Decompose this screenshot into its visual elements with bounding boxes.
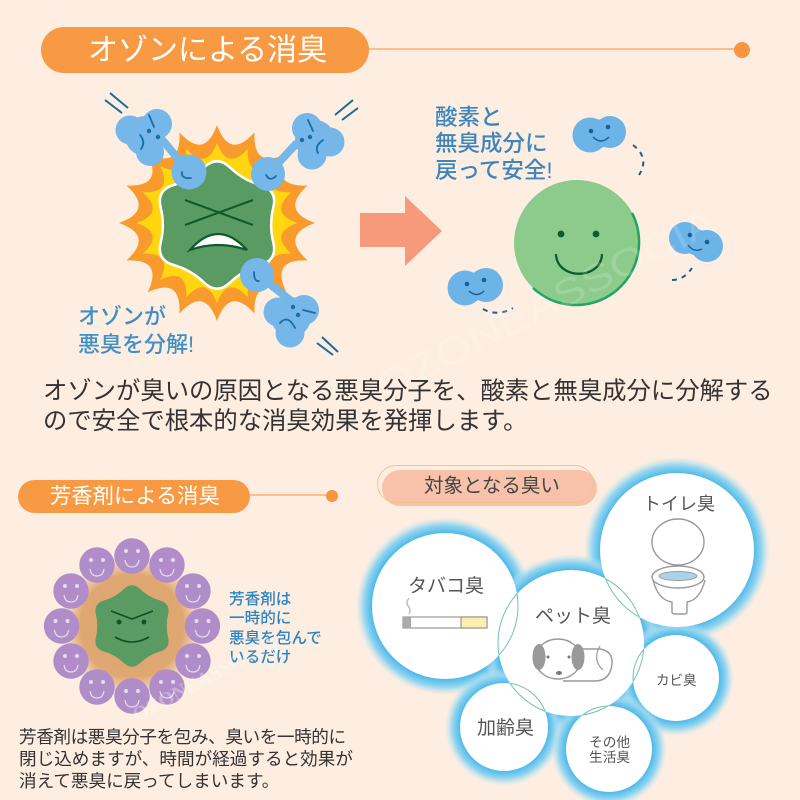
illustration: top oxygen molecule <box>572 116 643 175</box>
tobacco odor: タバコ臭 <box>408 575 484 597</box>
heading: ozone deodorization <box>41 27 750 73</box>
caption: back to oxygen and odorless: 酸素と <box>435 105 503 130</box>
heading: air freshener deodorization <box>18 480 338 513</box>
illustration: right oxygen molecule <box>669 222 723 280</box>
age-related odor: 加齢臭 <box>477 717 534 739</box>
label: target odors: 対象となる臭い <box>424 475 560 497</box>
caption: back to oxygen and odorless <box>435 105 553 183</box>
toilet odor: トイレ臭 <box>643 494 715 514</box>
caption: ozone decomposes odor <box>78 304 194 357</box>
illustration: smiling green molecule <box>514 180 640 306</box>
heading: air freshener deodorization: 芳香剤による消臭 <box>50 484 220 508</box>
fragrance explanation text: 消えて悪臭に戻ってしまいます。 <box>19 771 279 791</box>
other household odors <box>589 735 630 765</box>
mold odor: カビ臭 <box>656 673 697 688</box>
caption: fragrance only wraps odor: いるだけ <box>229 649 291 666</box>
fragrance explanation text <box>19 727 353 791</box>
caption: back to oxygen and odorless: 無臭成分に <box>435 131 548 156</box>
caption: ozone decomposes odor: オゾンが <box>78 304 166 329</box>
illustration: left oxygen molecule <box>448 268 513 313</box>
tobacco odor <box>403 575 487 628</box>
caption: fragrance only wraps odor <box>229 590 322 666</box>
caption: ozone decomposes odor: 悪臭を分解! <box>78 332 194 357</box>
label: target odors <box>378 466 597 506</box>
explanation text <box>43 378 773 435</box>
caption: fragrance only wraps odor: 芳香剤は <box>229 590 291 608</box>
fragrance explanation text: 芳香剤は悪臭分子を包み、臭いを一時的に <box>19 727 346 747</box>
odor circles <box>356 457 770 800</box>
illustration: ozone breaking down odor molecule <box>105 93 358 355</box>
other household odors: 生活臭 <box>589 750 630 765</box>
toilet odor <box>643 494 715 614</box>
caption: fragrance only wraps odor: 一時的に <box>229 609 291 627</box>
fragrance explanation text: 閉じ込めますが、時間が経過すると効果が <box>19 749 353 769</box>
explanation text: ので安全で根本的な消臭効果を発揮します。 <box>43 408 527 435</box>
watermark: OZONEASSOCIA <box>129 631 282 726</box>
explanation text: オゾンが臭いの原因となる悪臭分子を、酸素と無臭成分に分解する <box>43 378 773 405</box>
caption: back to oxygen and odorless: 戻って安全! <box>435 158 553 183</box>
caption: fragrance only wraps odor: 悪臭を包んで <box>229 628 322 647</box>
pet odor: ペット臭 <box>535 605 611 627</box>
illustration: molecule wrapped by fragrance <box>44 538 220 714</box>
watermark: OZONEASSOCIA <box>370 200 724 408</box>
other household odors: その他 <box>589 735 630 750</box>
heading: ozone deodorization: オゾンによる消臭 <box>88 34 327 67</box>
arrow <box>360 196 442 266</box>
pet odor <box>532 605 612 681</box>
